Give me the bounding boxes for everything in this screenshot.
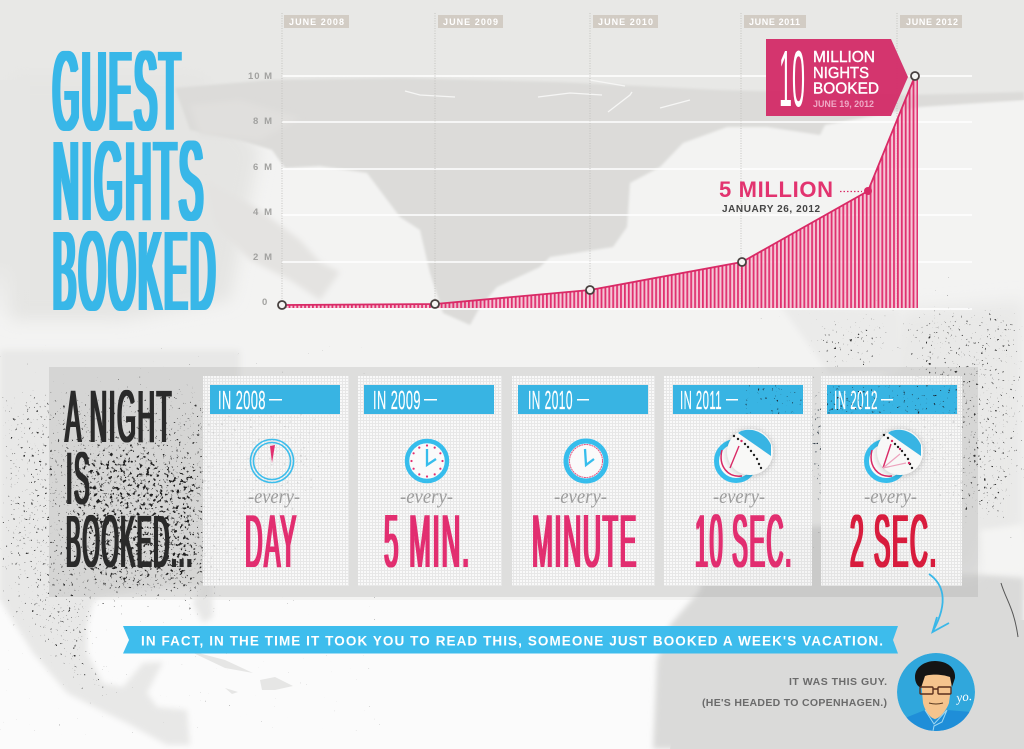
data points (278, 72, 919, 309)
icon: spinning clock 2012 (866, 429, 924, 480)
text: 10 SEC. (695, 499, 793, 583)
panel: 2011 (664, 376, 812, 586)
panel: 2008 (203, 376, 349, 586)
ribbon: IN FACT, IN THE TIME IT TOOK YOU TO READ THIS, SOMEONE JUST BOOKED A WEEK'S VACATION. (141, 634, 883, 648)
text: MINUTE (532, 499, 638, 583)
icon: clock 2009 (407, 441, 447, 481)
panel: 2009: -every- (400, 486, 453, 508)
date tags: JUNE 2009 (443, 17, 498, 27)
text: GUEST (53, 28, 183, 154)
y axis labels: 6 M (253, 162, 272, 173)
panel: 2011: IN 2011 (680, 385, 722, 415)
panel: 2010 (512, 376, 655, 586)
date tags: JUNE 2012 (906, 17, 958, 27)
line (282, 76, 915, 305)
callout: 10 million nights booked: 10 (779, 34, 805, 123)
panel: 2012: IN 2012 (834, 385, 878, 415)
caption: (HE'S HEADED TO COPENHAGEN.) (702, 697, 887, 709)
area (282, 76, 918, 308)
y axis labels: 0 (262, 297, 267, 308)
callout: 5 million: 5 MILLION (719, 177, 833, 202)
y axis labels (248, 71, 272, 308)
callout: 10 million nights booked: JUNE 19, 2012 (813, 99, 874, 110)
chart: guest nights booked (248, 13, 972, 309)
icon: spinning clock 2011 (716, 429, 774, 480)
y axis gridlines (282, 76, 972, 309)
panel: 2009: IN 2009 (373, 385, 421, 415)
callout: 10 million nights booked: BOOKED (813, 80, 879, 98)
callout: 10 million nights booked (766, 34, 908, 123)
title (53, 28, 218, 334)
caption (702, 676, 887, 709)
point: 5 million (864, 187, 872, 195)
text: 5 MIN. (384, 499, 471, 583)
text: NIGHTS (53, 118, 206, 244)
date tags: JUNE 2011 (749, 17, 800, 27)
callout: 10 million nights booked: MILLION (813, 49, 875, 66)
avatar: yo. (953, 688, 973, 705)
timeline markers (282, 13, 897, 305)
y axis labels: 4 M (253, 207, 272, 218)
heading: a night is booked (65, 375, 194, 583)
panel: 2012 (821, 376, 962, 586)
date tags: JUNE 2010 (598, 17, 653, 27)
icon: clock 2008 (250, 440, 294, 482)
text: BOOKED (53, 208, 218, 334)
arrow (929, 574, 949, 632)
panel: 2008: -every- (248, 486, 300, 508)
panel: 2008: IN 2008 (218, 385, 266, 415)
panel: 2011: -every- (713, 486, 765, 508)
panel: night is booked backing (49, 367, 978, 597)
icon: clock 2010 (566, 441, 606, 481)
y axis labels: 8 M (253, 116, 272, 127)
caption: IT WAS THIS GUY. (789, 676, 887, 688)
panel: 2009 (358, 376, 502, 586)
y axis labels: 2 M (253, 252, 272, 263)
callout: 5 million (719, 177, 862, 215)
avatar (897, 653, 975, 735)
splatter over 2011 and 2012 (745, 385, 957, 500)
text: BOOKED... (66, 500, 194, 583)
heading: a night is booked: IS (66, 437, 91, 520)
date tags (284, 15, 962, 28)
panel: 2010: -every- (554, 486, 607, 508)
panel: 2010: IN 2010 (528, 385, 573, 415)
date tags: JUNE 2008 (289, 17, 344, 27)
city lights splatter (0, 310, 1020, 690)
panel: 2008: DAY (245, 499, 298, 583)
y axis labels: 10 M (248, 71, 272, 82)
callout: 5 million: JANUARY 26, 2012 (722, 204, 820, 215)
text: A NIGHT (65, 375, 173, 458)
panel: 2012: -every- (864, 486, 917, 508)
callout: 10 million nights booked: NIGHTS (813, 65, 869, 82)
ribbon (123, 626, 898, 654)
